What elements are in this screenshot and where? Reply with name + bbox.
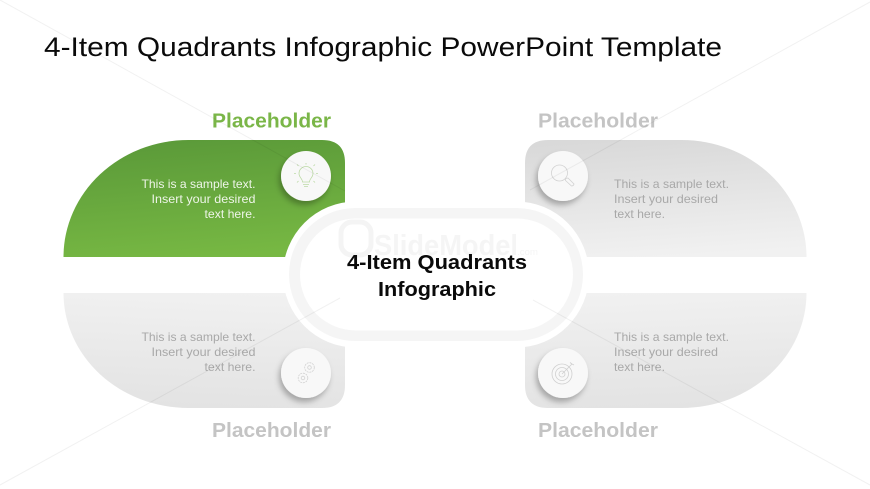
title: 4-Item Quadrants Infographic PowerPoint Template <box>44 32 722 62</box>
text block: bottom-right: Insert your desired <box>614 345 718 359</box>
panel: top-right grey quadrant <box>525 140 806 257</box>
watermark: .com <box>517 247 538 257</box>
text block: top-right <box>614 177 729 221</box>
text block: top-left: This is a sample text. <box>142 177 256 191</box>
text block: bottom-left <box>142 330 256 374</box>
icon: gears <box>281 348 331 398</box>
panel: bottom-right grey quadrant <box>525 293 806 408</box>
center heading <box>347 252 527 301</box>
icon: light bulb <box>281 151 331 201</box>
center ring badge <box>283 202 589 348</box>
center heading: 4-Item Quadrants <box>347 252 527 274</box>
text block: top-left: Insert your desired <box>152 192 256 206</box>
text block: top-right: text here. <box>614 207 665 221</box>
panel: bottom-left grey quadrant <box>64 293 345 408</box>
text block: top-right: This is a sample text. <box>614 177 729 191</box>
heading: bottom-right placeholder: Placeholder <box>538 420 658 442</box>
text block: top-right: Insert your desired <box>614 192 718 206</box>
watermark: SlideModel <box>374 230 518 262</box>
text block: bottom-right: text here. <box>614 360 665 374</box>
icon: target <box>538 348 588 398</box>
icon: magnifier <box>538 151 588 201</box>
text block: bottom-left: This is a sample text. <box>142 330 256 344</box>
text block: bottom-left: Insert your desired <box>152 345 256 359</box>
heading: top-right placeholder: Placeholder <box>538 110 658 132</box>
heading: bottom-left placeholder: Placeholder <box>212 420 331 442</box>
center heading: Infographic <box>378 279 496 301</box>
heading: top-left placeholder: Placeholder <box>212 110 331 132</box>
panel: top-left green quadrant <box>64 140 345 257</box>
watermark <box>341 222 538 262</box>
text block: bottom-right <box>614 330 729 374</box>
text block: bottom-right: This is a sample text. <box>614 330 729 344</box>
text block: top-left: text here. <box>204 207 256 221</box>
text block: bottom-left: text here. <box>204 360 256 374</box>
text block: top-left <box>142 177 256 221</box>
